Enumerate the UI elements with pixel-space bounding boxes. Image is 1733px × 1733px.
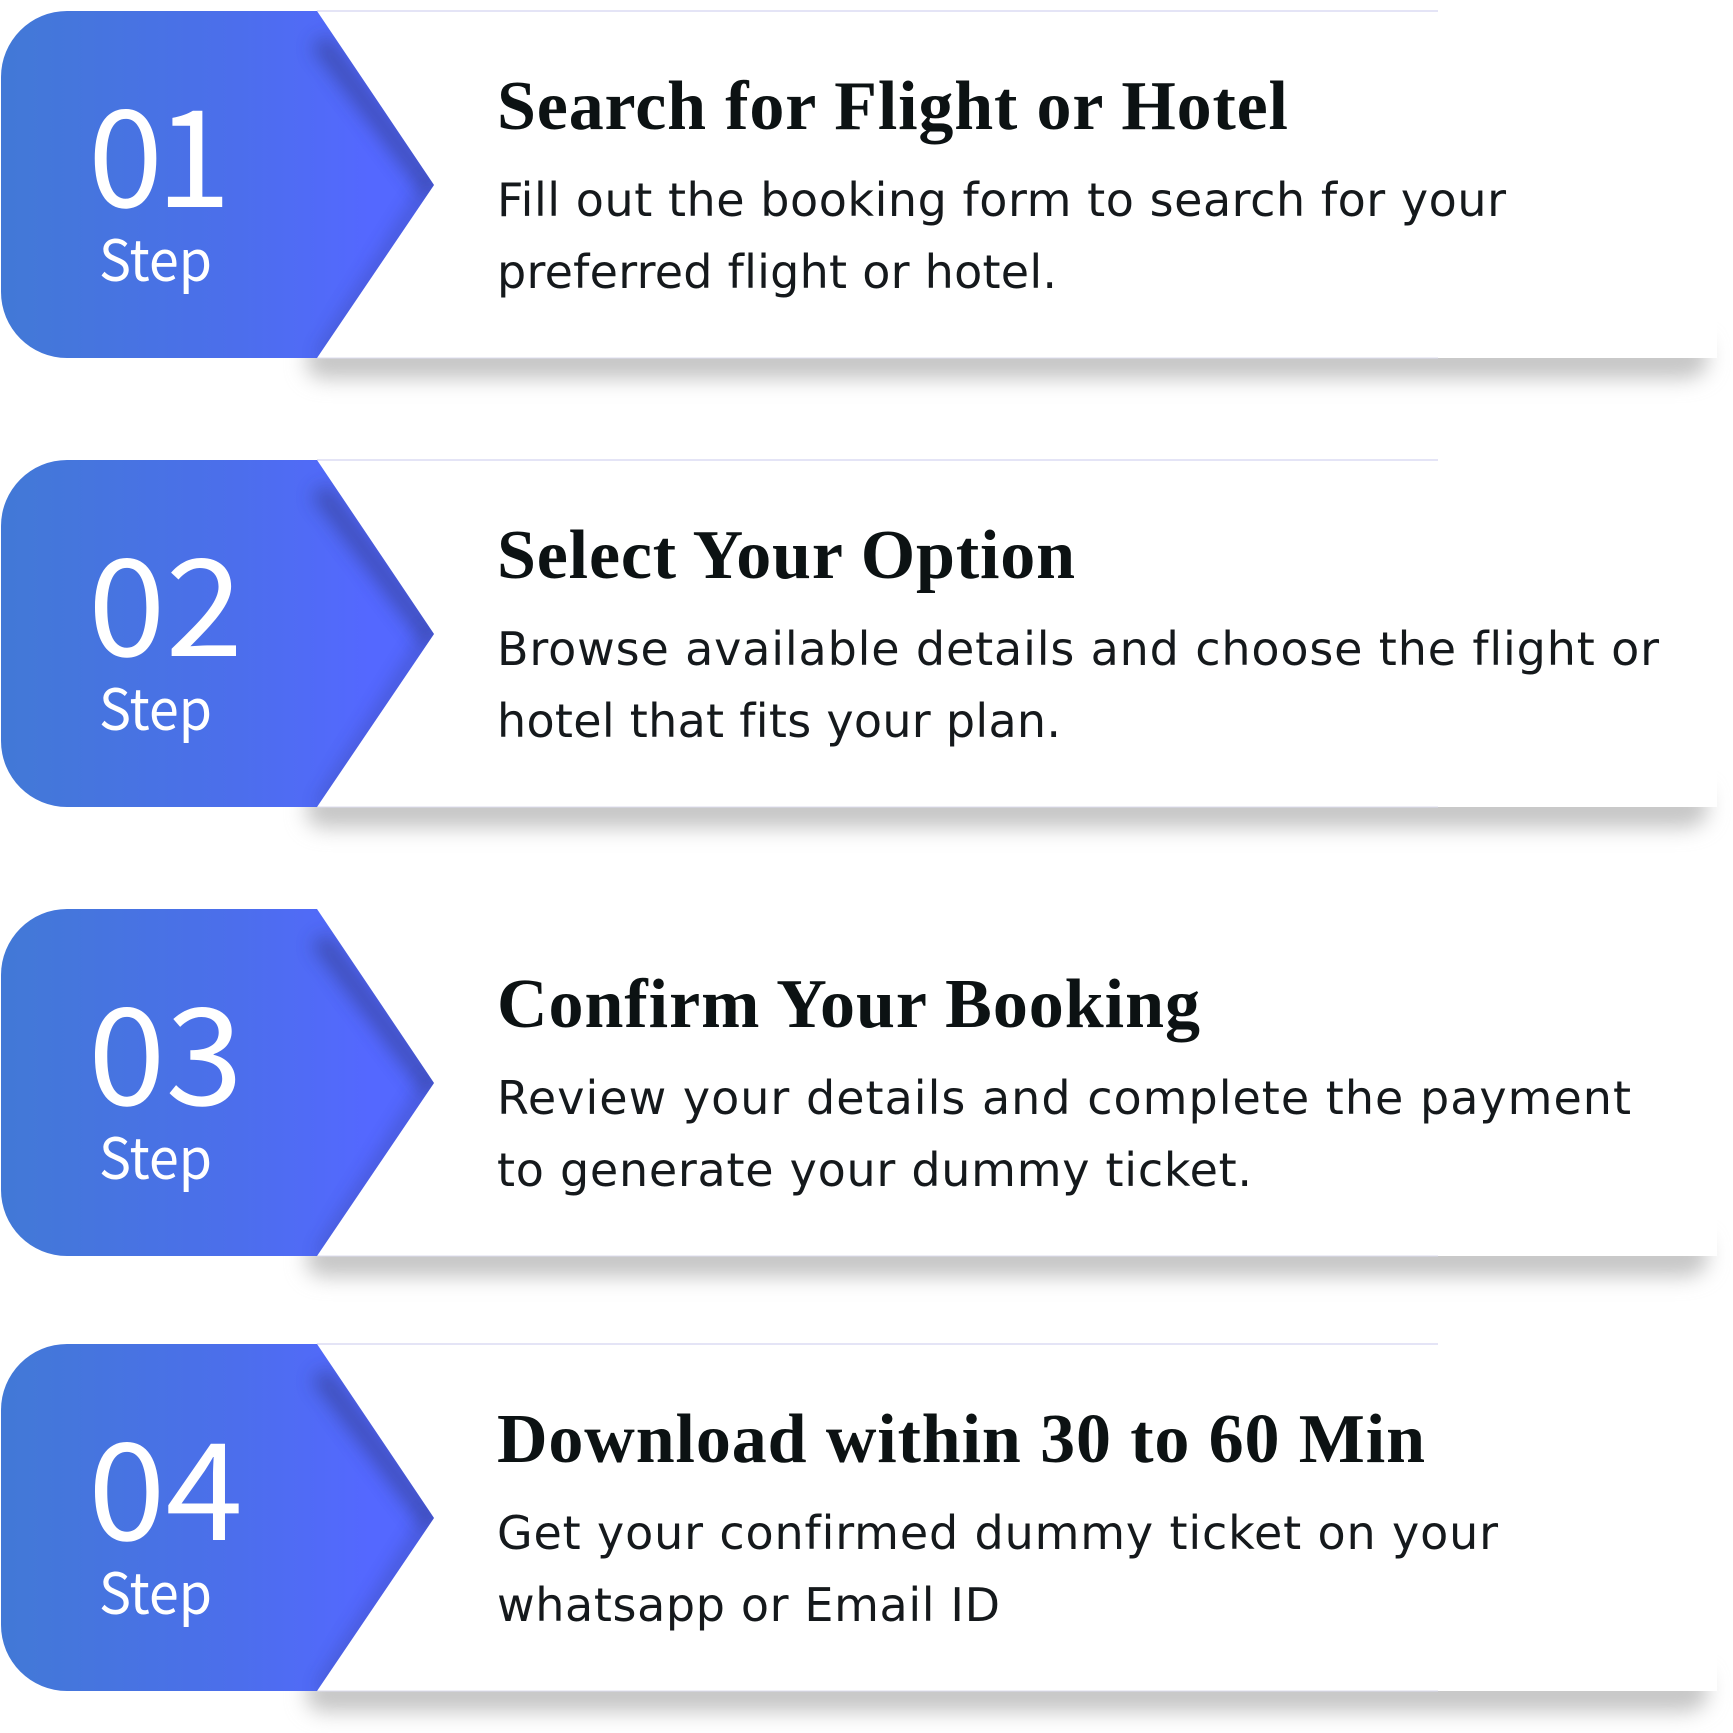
step label: Step xyxy=(99,1114,212,1196)
step number: 02 xyxy=(88,499,243,695)
heading: Confirm Your Booking xyxy=(497,966,1200,1043)
step label: Step xyxy=(99,665,212,747)
badge xyxy=(1,460,434,807)
step 4 xyxy=(1,1344,1717,1712)
card xyxy=(300,1344,1717,1691)
card xyxy=(300,460,1717,807)
card shadow xyxy=(305,341,1708,379)
description: Review your details and complete the payment xyxy=(497,1071,1631,1125)
card xyxy=(300,11,1717,358)
description: preferred flight or hotel. xyxy=(497,245,1057,299)
description: hotel that fits your plan. xyxy=(497,694,1061,748)
badge xyxy=(1,909,434,1256)
heading: Download within 30 to 60 Min xyxy=(497,1401,1425,1478)
description: whatsapp or Email ID xyxy=(497,1578,1000,1632)
card shadow xyxy=(305,790,1708,828)
description: Fill out the booking form to search for your xyxy=(497,173,1506,227)
badge xyxy=(1,1344,434,1691)
step number: 03 xyxy=(88,948,243,1144)
step label: Step xyxy=(99,1549,212,1631)
step label: Step xyxy=(99,216,212,298)
heading: Select Your Option xyxy=(497,517,1075,594)
description: to generate your dummy ticket. xyxy=(497,1143,1252,1197)
step number: 04 xyxy=(88,1383,243,1579)
step 3 xyxy=(1,909,1717,1277)
card shadow xyxy=(305,1674,1708,1712)
description: Browse available details and choose the flight or xyxy=(497,622,1659,676)
card xyxy=(300,909,1717,1256)
step 2 xyxy=(1,460,1717,828)
heading: Search for Flight or Hotel xyxy=(497,68,1288,145)
card shadow xyxy=(305,1239,1708,1277)
step 1 xyxy=(1,11,1717,379)
description: Get your confirmed dummy ticket on your xyxy=(497,1506,1498,1560)
step number: 01 xyxy=(88,50,231,246)
badge xyxy=(1,11,434,358)
